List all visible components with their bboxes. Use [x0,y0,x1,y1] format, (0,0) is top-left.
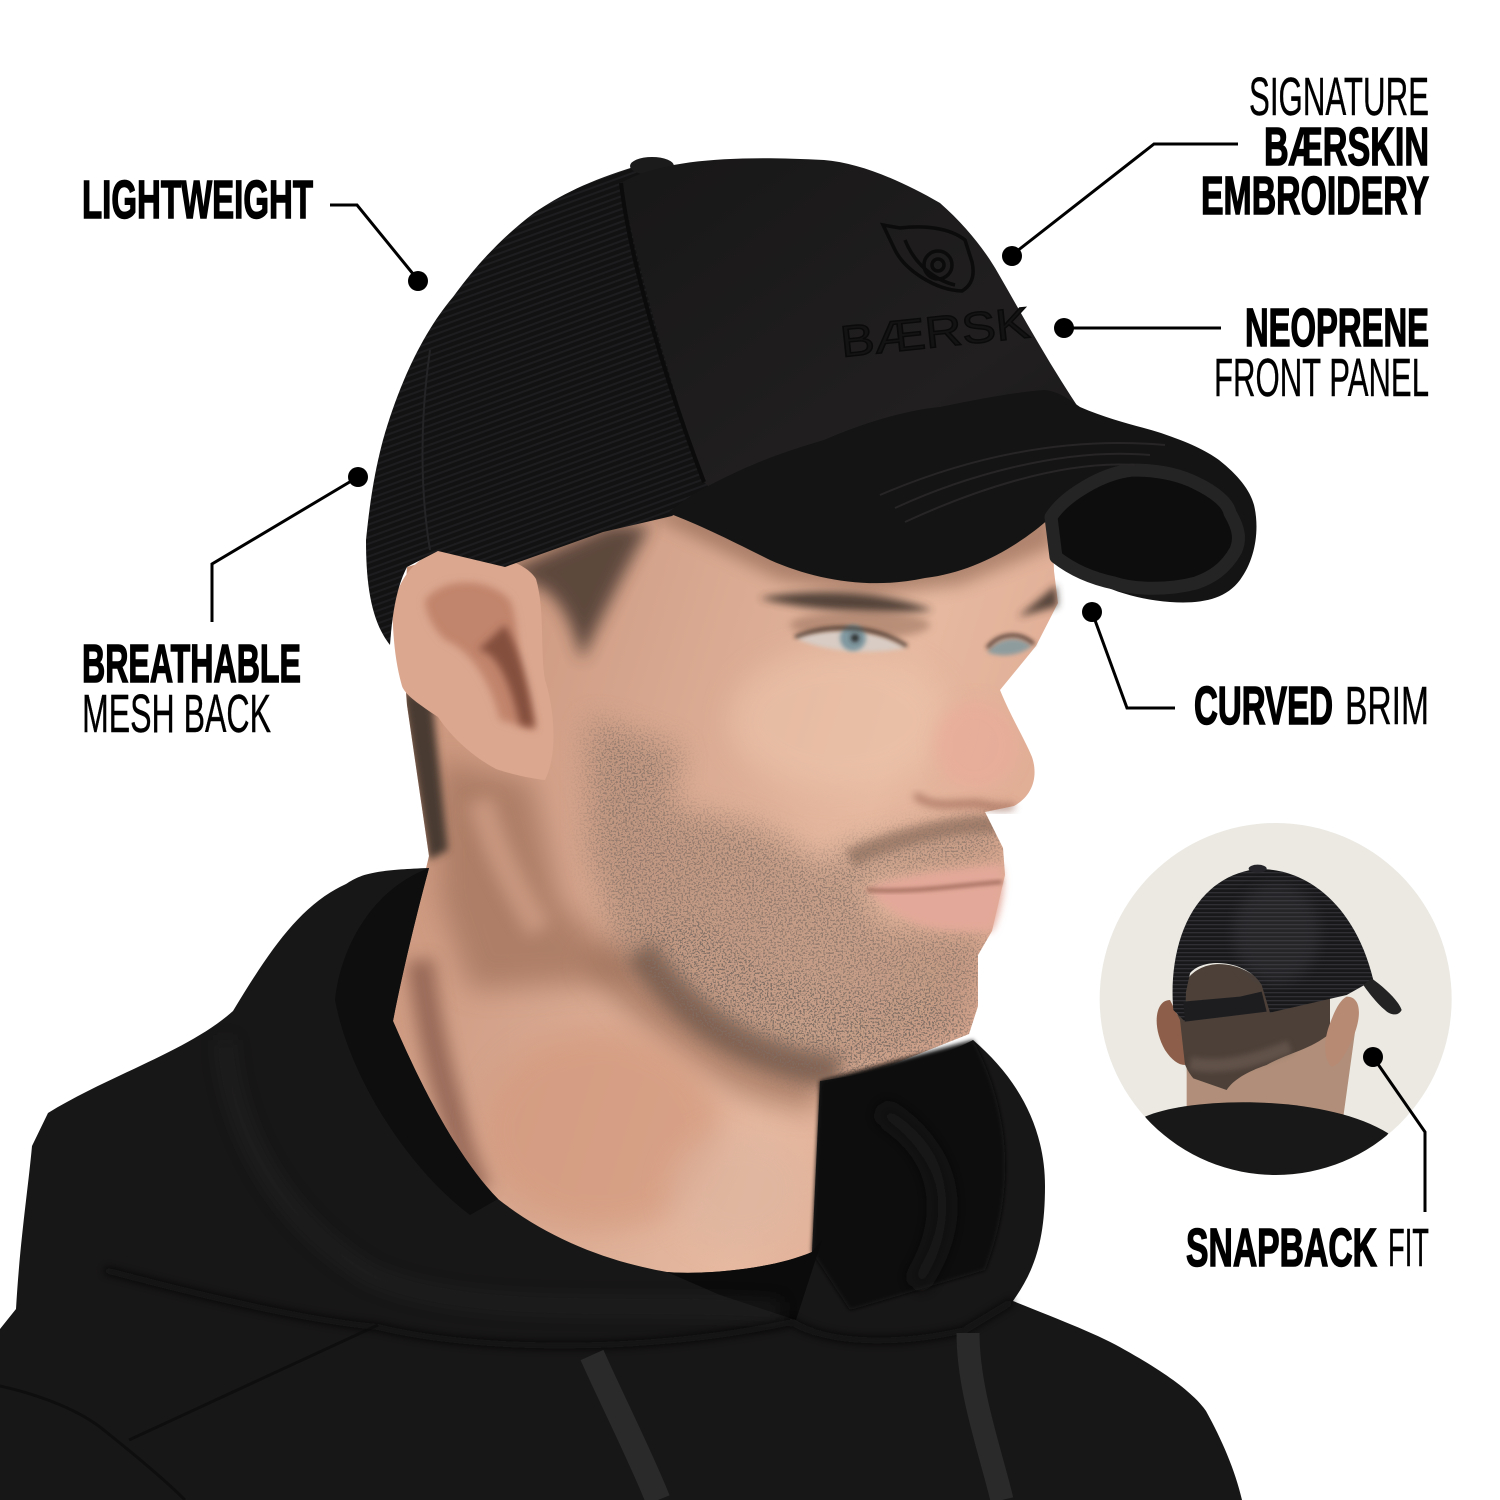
shoulder seams [0,1325,378,1500]
nape hair [402,690,448,860]
mesh highlight [1236,886,1318,980]
leader line [1373,1057,1425,1212]
cap visor tip [1363,978,1402,1014]
brim stitching [880,443,1165,522]
ear [393,551,554,780]
hood inner left [335,868,498,1215]
skin shading [402,510,1060,1250]
brim rim and underside [1051,470,1238,588]
embroidered wordmark: BÆRSK [838,298,1032,367]
top button [1249,865,1267,873]
label [82,634,301,744]
leader line [1092,612,1175,708]
cap [366,157,1256,645]
label: BREATHABLE [82,634,301,694]
nose wing [915,795,1014,807]
leader line [1012,144,1238,255]
dot [1002,246,1022,266]
eyes [795,625,1034,655]
head and neck skin [385,500,1058,1300]
label: FIT [1388,1218,1429,1278]
callout: lightweight [82,170,428,291]
snap strap [1183,992,1267,1022]
label [1214,298,1429,408]
dot [348,467,368,487]
leader line [212,477,358,622]
embroidered bear logo [883,225,973,291]
hood drape shadow [105,1270,1013,1346]
forehead shadow under brim [640,510,1056,595]
mesh side seam [422,350,430,550]
beard tone [590,720,1004,1078]
front panel [621,158,1080,490]
eye socket shade [790,611,930,639]
callout: embroidery [1002,67,1429,266]
label: LIGHTWEIGHT [82,170,313,230]
mesh back [366,165,712,645]
drawstring left [592,1355,658,1500]
dot [1082,602,1102,622]
panel seam [621,183,704,482]
dot [1363,1047,1383,1067]
label: SNAPBACK [1186,1218,1377,1278]
dot [1054,318,1074,338]
hood fold highlights [225,1040,780,1310]
right hood fold [880,1110,942,1285]
label [1201,67,1429,226]
rear cap mesh [1173,869,1373,1022]
photo: man wearing cap [0,157,1256,1500]
temple hair [505,525,650,660]
left ear [1157,1000,1185,1065]
lips [867,864,1003,931]
leader line [330,205,418,280]
label: MESH BACK [82,684,271,744]
leader line [1064,326,1221,330]
right ear [1326,996,1359,1036]
callout: breathable [82,467,368,744]
callout: neoprene [1054,298,1429,408]
hood inner right [812,1040,1005,1310]
brim [668,390,1256,602]
hoodie shoulders [1145,1102,1388,1175]
inner shirt [667,1240,822,1320]
top button [630,157,674,175]
callout: curved brim [1082,602,1429,736]
neck [1186,1032,1355,1114]
hair nape blend [1190,1047,1290,1065]
inset background circle [1100,823,1452,1175]
label: CURVED [1194,676,1333,736]
hair [1177,964,1330,1090]
eyebrow [759,585,1058,617]
label: BRIM [1345,676,1429,736]
callout: snapback [1186,1047,1429,1278]
hoodie [0,868,1242,1500]
stubble texture [575,712,1004,1076]
inset: snapback rear view [1100,823,1452,1187]
drawstring right [968,1333,1002,1500]
dot [408,271,428,291]
